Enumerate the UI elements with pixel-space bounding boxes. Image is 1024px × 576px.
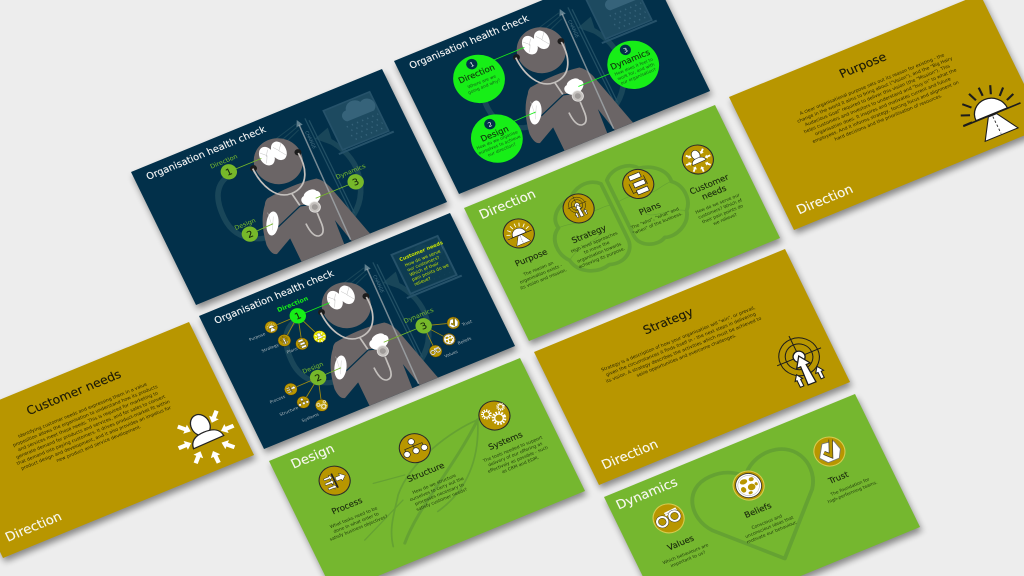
callout: direction xyxy=(445,36,540,111)
slide: full model map xyxy=(199,213,517,453)
figure with stethoscope xyxy=(196,89,431,281)
column: values: Values xyxy=(666,533,696,552)
column: purpose xyxy=(491,210,568,291)
window callout: customer needs: Customer needs xyxy=(398,240,444,263)
column: strategy: organisation towards xyxy=(576,242,622,264)
slide: direction overview xyxy=(464,105,782,345)
body text: Strategy is a description of how your organisation will "win", or prevail, xyxy=(600,305,756,373)
body text: organisation does. It inspires and motivates current and future xyxy=(814,76,952,137)
branch: direction: 1 xyxy=(293,311,303,322)
column: purpose: organisation exists - xyxy=(519,263,563,285)
heading: Strategy xyxy=(641,305,696,337)
branch: design xyxy=(261,355,357,431)
branch: dynamics: Beliefs xyxy=(457,336,472,346)
branch: direction: Direction xyxy=(276,295,309,314)
background brain outline xyxy=(535,150,702,281)
column: beliefs: Conscious and xyxy=(751,514,783,530)
callout: direction: Direction xyxy=(457,62,496,85)
column: process: done in what order to xyxy=(333,511,380,534)
node: design: Design xyxy=(233,217,257,232)
figure with stethoscope xyxy=(459,0,694,170)
window callout: customer needs: relieve? xyxy=(413,276,432,287)
title: Organisation health check xyxy=(213,268,336,326)
branch: direction: Strategy xyxy=(261,343,280,354)
slide: customer needs detail xyxy=(0,322,256,562)
column: structure: Structure xyxy=(405,460,446,484)
column: structure: How do we structure xyxy=(412,473,457,495)
body text: product design and development, and it also provides an impetus for xyxy=(20,405,172,471)
column: structure: processes necessary to xyxy=(414,482,465,507)
window callout: customer needs: pain points do we xyxy=(411,263,450,282)
column: plans xyxy=(607,161,683,236)
body text: employees. And it informs strategy, forcing focus and alignment on xyxy=(811,80,960,144)
column: process: Process xyxy=(330,495,364,516)
column: customer needs xyxy=(668,138,748,230)
column: trust: Trust xyxy=(826,469,850,486)
section title: Direction xyxy=(477,186,538,222)
branch: dynamics: 3 xyxy=(419,321,429,332)
column: strategy xyxy=(548,186,626,270)
column: systems xyxy=(460,389,551,479)
background heart outline xyxy=(682,440,843,576)
column: structure: ourselves to carry out the xyxy=(409,476,465,503)
column: strategy: Strategy xyxy=(570,223,608,245)
callout: design: 2 xyxy=(487,120,494,129)
column: values: important to us? xyxy=(670,550,706,568)
window callout: customer needs: our customers? xyxy=(406,255,440,273)
body text: its vision. A strategy describes the activities which must be achieved to xyxy=(605,316,762,384)
column: systems: as CRM and EDM. xyxy=(501,455,540,474)
column: structure: satisfy customer needs? xyxy=(416,487,468,512)
callout: dynamics: How does it feel to xyxy=(614,57,654,77)
node: direction xyxy=(209,145,265,184)
column: systems: The tools needed to support xyxy=(482,435,543,464)
background leaf outline xyxy=(335,420,516,556)
column: process: satisfy business objectives? xyxy=(329,514,389,542)
node: design: 2 xyxy=(245,229,255,240)
callout: direction: going and why? xyxy=(467,78,501,95)
axis label: CHANGE xyxy=(567,19,580,39)
callout: design: ourselves to achieve xyxy=(478,134,522,156)
branch: dynamics: Values xyxy=(444,350,459,359)
callout: design: Design xyxy=(479,124,510,144)
node: direction: 1 xyxy=(224,167,234,178)
column: strategy: to move the xyxy=(583,240,611,255)
column: beliefs: Beliefs xyxy=(743,500,773,520)
column: systems: Systems xyxy=(487,429,524,452)
body text: Identifying customer needs and expressing them in a value xyxy=(17,382,148,439)
figure with stethoscope xyxy=(264,233,499,425)
slide: purpose detail xyxy=(729,0,1024,234)
column: purpose: its vision and mission. xyxy=(519,267,568,291)
section title: Design xyxy=(288,441,337,472)
slide: three bright question circles xyxy=(394,0,712,198)
column: process: What tasks need to be xyxy=(329,506,378,529)
column: plans: "when" of the business. xyxy=(632,211,683,236)
branch: dynamics: Trust xyxy=(461,319,473,327)
column: purpose: Purpose xyxy=(513,247,549,269)
callout: direction: 1 xyxy=(468,60,475,69)
column: beliefs: unconscious ideas that xyxy=(744,515,794,539)
branch: dynamics xyxy=(377,295,483,377)
column: customer needs: customers? Which of xyxy=(697,198,743,220)
column: process xyxy=(300,455,389,542)
column: strategy: High level approaches xyxy=(570,231,618,254)
column: trust: The foundation for xyxy=(829,477,871,497)
branch: direction: Purpose xyxy=(248,332,266,342)
section title: Dynamics xyxy=(614,475,680,513)
branch: design: Design xyxy=(301,360,325,375)
body text: helps customers and investors to understand and "buy in" to what the xyxy=(803,67,957,134)
callout: design: our direction? xyxy=(487,142,517,158)
body text: change in the world it aims to bring about ("Vision"), and the "Big Hairy xyxy=(796,56,954,124)
branch: design: Process xyxy=(269,395,286,405)
column: beliefs xyxy=(718,462,798,545)
node: dynamics: Dynamics xyxy=(335,162,367,181)
column: strategy: achieving its purpose. xyxy=(578,246,626,270)
title: Organisation health check xyxy=(145,124,268,182)
body text: seize opportunities and overcome challenges. xyxy=(636,333,737,378)
branch: design: 2 xyxy=(313,372,323,384)
slide: overview with numbered labels xyxy=(131,69,449,309)
body text: new product and service development. xyxy=(55,424,142,463)
callout: dynamics: 3 xyxy=(622,46,629,54)
column: systems: delivery of our offering as xyxy=(487,441,543,468)
column: structure xyxy=(383,423,470,513)
callout: dynamics: our organisation? xyxy=(620,67,657,86)
body text: that demand into paying customers. It drives product-market fit within xyxy=(16,399,171,466)
node: design xyxy=(233,211,277,245)
node: dynamics xyxy=(309,162,374,205)
heading: Purpose xyxy=(837,50,889,81)
footer label: Direction xyxy=(794,182,856,218)
body text: A clear organisational purpose sets out its reason for existing - the xyxy=(799,52,945,116)
axis label: CHANGE xyxy=(304,130,317,150)
column: values xyxy=(639,496,712,571)
body text: proposition allows the organisation to understand how its products xyxy=(12,384,159,448)
column: plans: The "who", "what" and xyxy=(630,206,680,230)
column: plans: Plans xyxy=(637,200,662,217)
body text xyxy=(793,50,967,152)
body text: Audacious Goal" required to deliver this vision (the "Mission"). This xyxy=(804,63,951,127)
slide: strategy detail xyxy=(534,249,852,489)
node: direction: Direction xyxy=(209,153,239,170)
window callout: customer needs: How do we serve xyxy=(404,249,441,268)
slide: design overview xyxy=(269,358,587,576)
callout: direction: Where are we xyxy=(467,74,497,90)
column: customer needs: How do we serve our xyxy=(695,192,741,215)
body text: generate demand for products and services, and for sales to convert xyxy=(15,394,166,460)
body text xyxy=(5,377,176,477)
body text: and services meet those needs. This is required for marketing to xyxy=(17,390,159,452)
axis label: CHANGE xyxy=(372,274,385,294)
column: beliefs: motivate our behaviour. xyxy=(746,520,798,545)
column: systems: effectively as possible - such xyxy=(487,445,549,474)
branch: design: Structure xyxy=(279,406,299,417)
callout: dynamics xyxy=(568,33,668,109)
icon: person with inward arrows xyxy=(168,404,246,474)
callout: dynamics: work for, and with xyxy=(617,62,655,81)
column: values: Which behaviours are xyxy=(662,543,709,566)
column: trust: high-performing teams. xyxy=(827,480,878,504)
column: purpose: The reason an xyxy=(522,261,554,277)
window callout: customer needs xyxy=(393,236,458,292)
slide: dynamics overview xyxy=(604,394,922,576)
column: customer needs: their pain points do xyxy=(701,204,744,225)
branch: design: Systems xyxy=(301,412,320,423)
column: trust xyxy=(801,427,878,504)
callout: design xyxy=(463,99,551,170)
branch: direction xyxy=(240,288,344,367)
body text: hard decisions and the prioritisation of resources. xyxy=(834,93,943,142)
branch: direction: Plans xyxy=(286,347,298,355)
column: customer needs: needs xyxy=(700,183,728,202)
icon: sun and road xyxy=(950,76,1024,146)
icon: target with arrows xyxy=(767,327,834,392)
title: Organisation health check xyxy=(408,13,531,71)
body text: given the circumstances it finds itself in - the next steps in delivering xyxy=(605,311,757,377)
footer label: Direction xyxy=(3,509,64,545)
callout: dynamics: Dynamics xyxy=(609,47,652,72)
callout: design: How do we organise xyxy=(476,130,519,151)
column: customer needs: Customer xyxy=(688,172,731,196)
column: customer needs: we relieve? xyxy=(712,212,738,226)
branch: dynamics: Dynamics xyxy=(403,306,435,325)
node: dynamics: 3 xyxy=(351,177,361,188)
footer label: Direction xyxy=(599,437,661,473)
heading: Customer needs xyxy=(24,367,123,418)
window callout: customer needs: Which of their xyxy=(409,261,440,277)
